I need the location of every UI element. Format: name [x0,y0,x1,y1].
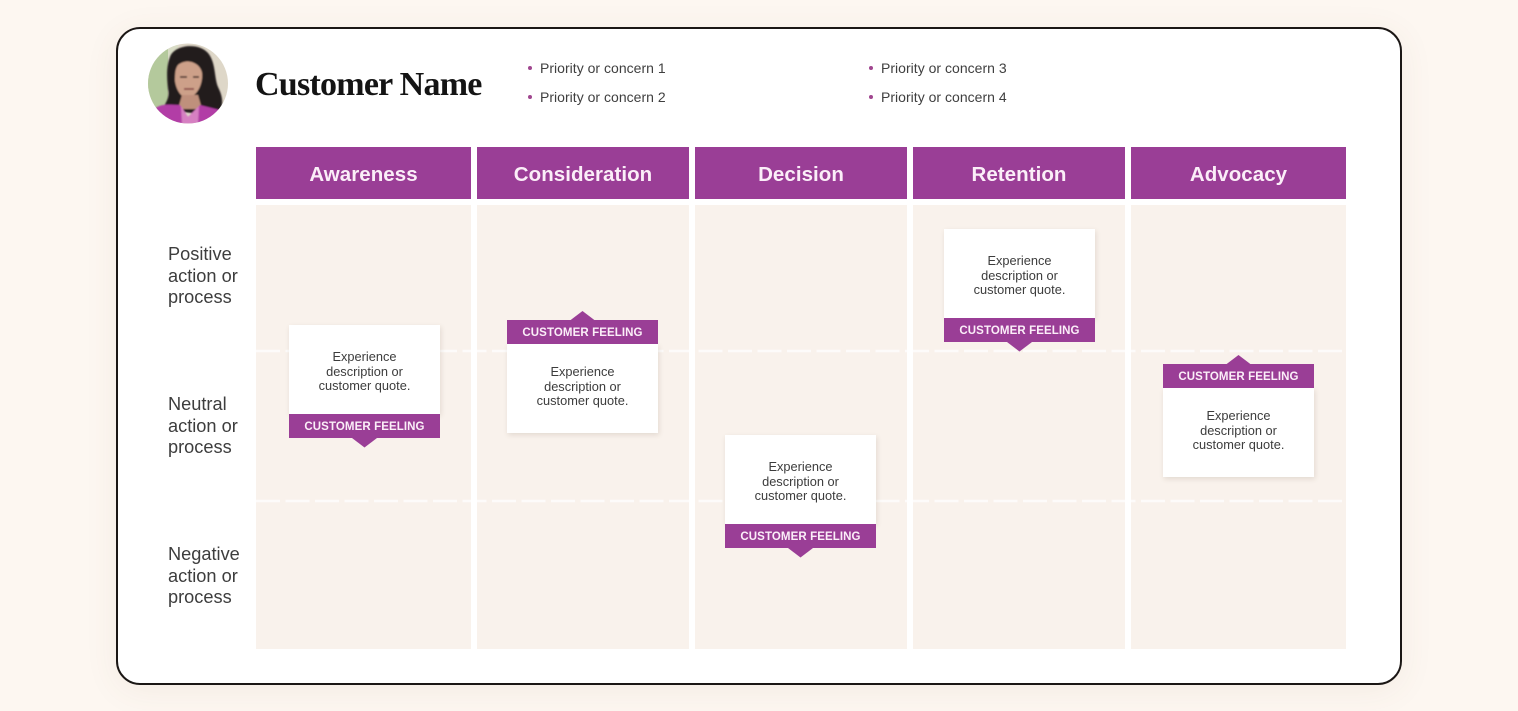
card text: description or [762,474,839,489]
arrow [1226,355,1250,364]
card text [537,364,628,408]
card text [974,253,1065,297]
arrow [788,548,813,558]
row label: negative [168,544,240,607]
bullet [869,95,873,99]
header: Retention: Retention [972,163,1066,186]
column background: Retention [913,205,1125,649]
card text: customer quote. [319,378,410,393]
column background: Consideration [477,205,689,649]
card text: customer quote. [537,393,628,408]
experience card: Advocacy [1162,355,1316,480]
feeling band: CUSTOMER FEELING [1178,371,1299,383]
priority 4: Priority or concern 4 [881,89,1007,105]
feeling band [507,320,658,344]
card text: description or [981,268,1058,283]
card text: customer quote. [1193,437,1284,452]
feeling band [289,414,440,438]
feeling band: CUSTOMER FEELING [740,531,861,543]
card text: Experience [987,253,1052,268]
header: Consideration [477,147,689,199]
header: Decision [695,147,907,199]
row label: neutral [168,394,238,457]
row label: negative: Negative [168,544,240,564]
card text: Experience [1206,408,1271,423]
priority 2: Priority or concern 2 [540,89,666,105]
card text: Experience [332,349,397,364]
row label: neutral: process [168,437,232,457]
experience card: Awareness [288,325,442,448]
card text: Experience [550,364,615,379]
column background: Advocacy [1131,205,1346,649]
header: Awareness [256,147,471,199]
title: Customer Name [255,66,482,103]
feeling band: CUSTOMER FEELING [522,327,643,339]
card text: Experience [768,459,833,474]
header: Advocacy: Advocacy [1190,163,1287,186]
priority 1: Priority or concern 1 [540,60,666,76]
header: Retention [913,147,1125,199]
card text: customer quote. [755,488,846,503]
column background: Awareness [256,205,471,649]
priority 3: Priority or concern 3 [881,60,1007,76]
bullet [869,66,873,70]
row label: negative: action or [168,566,238,586]
row label: positive: action or [168,266,238,286]
row label: negative: process [168,587,232,607]
arrow [570,311,594,320]
row label: positive: process [168,287,232,307]
priorities list [528,60,1007,105]
card text [1193,408,1284,452]
row label: neutral: action or [168,416,238,436]
card text: description or [1200,423,1277,438]
bullet [528,95,532,99]
bullet [528,66,532,70]
card text: description or [326,364,403,379]
row label: neutral: Neutral [168,394,227,414]
header: Advocacy [1131,147,1346,199]
card text [755,459,846,503]
feeling band [1163,364,1314,388]
feeling band: CUSTOMER FEELING [959,325,1080,337]
row label: positive: Positive [168,244,232,264]
experience card: Consideration [506,311,660,436]
main card [116,27,1402,685]
feeling band [725,524,876,548]
card text: customer quote. [974,282,1065,297]
header: Awareness: Awareness [309,163,418,186]
experience card: Decision [724,435,878,558]
arrow [1007,342,1032,352]
icon: customer portrait [148,44,228,124]
arrow [352,438,377,448]
header: Consideration: Consideration [514,163,652,186]
card text: description or [544,379,621,394]
header: Decision: Decision [758,163,844,186]
card text [319,349,410,393]
column background: Decision [695,205,907,649]
row label: positive [168,244,238,307]
feeling band: CUSTOMER FEELING [304,421,425,433]
experience card: Retention [944,229,1098,352]
feeling band [944,318,1095,342]
